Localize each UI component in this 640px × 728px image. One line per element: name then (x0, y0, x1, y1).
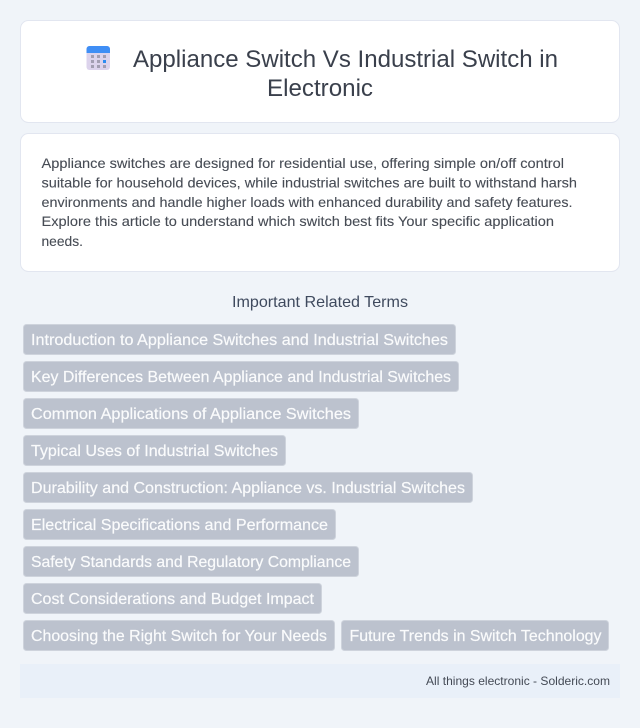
title panel (20, 20, 620, 122)
title text: Electronic (267, 75, 373, 102)
tag: durability: Durability and Construction: Appliance vs. Industrial Switches (31, 480, 465, 497)
tag list (24, 324, 608, 650)
tag: common applications: Common Applications of Appliance Switches (31, 406, 351, 423)
tag: electrical specifications (24, 510, 336, 540)
tag: typical uses (24, 436, 286, 466)
tag: cost considerations: Cost Considerations and Budget Impact (31, 591, 315, 608)
tag: introduction (24, 324, 456, 354)
tag: future trends (342, 620, 608, 650)
tag: common applications (24, 398, 358, 428)
intro text block: Appliance switches are designed for residential use, offering simple on/off control (42, 155, 564, 171)
title text (133, 46, 558, 102)
intro text block (42, 155, 577, 249)
panel: introduction (20, 134, 620, 272)
tag: introduction: Introduction to Appliance Switches and Industrial Switches (31, 332, 448, 349)
intro text block: suitable for household devices, while industrial switches are built to withstand harsh (42, 174, 577, 190)
footer (20, 664, 620, 698)
tag: key differences: Key Differences Between Appliance and Industrial Switches (31, 369, 451, 386)
tag: choosing the right switch: Choosing the Right Switch for Your Needs (31, 628, 327, 645)
tag: safety standards (24, 546, 358, 576)
tag: safety standards: Safety Standards and Regulatory Compliance (31, 554, 351, 571)
intro text block: needs. (42, 233, 83, 249)
icon: calendar grid (86, 46, 110, 70)
tag: electrical specifications: Electrical Specifications and Performance (31, 517, 328, 534)
title text: Appliance Switch Vs Industrial Switch in (133, 46, 558, 73)
tag: key differences (24, 362, 458, 392)
tag: cost considerations (24, 584, 322, 614)
intro text block: Explore this article to understand which switch best fits Your specific application (42, 213, 554, 229)
tag: typical uses: Typical Uses of Industrial Switches (31, 443, 278, 460)
footer credit: All things electronic - Solderic.com (426, 674, 610, 688)
intro text block: environments and handle higher loads with enhanced durability and safety features. (42, 194, 572, 210)
tag: choosing the right switch (24, 620, 334, 650)
tag: durability (24, 472, 472, 502)
heading: important related terms: Important Related Terms (232, 294, 408, 311)
tag: future trends: Future Trends in Switch Technology (350, 628, 602, 645)
